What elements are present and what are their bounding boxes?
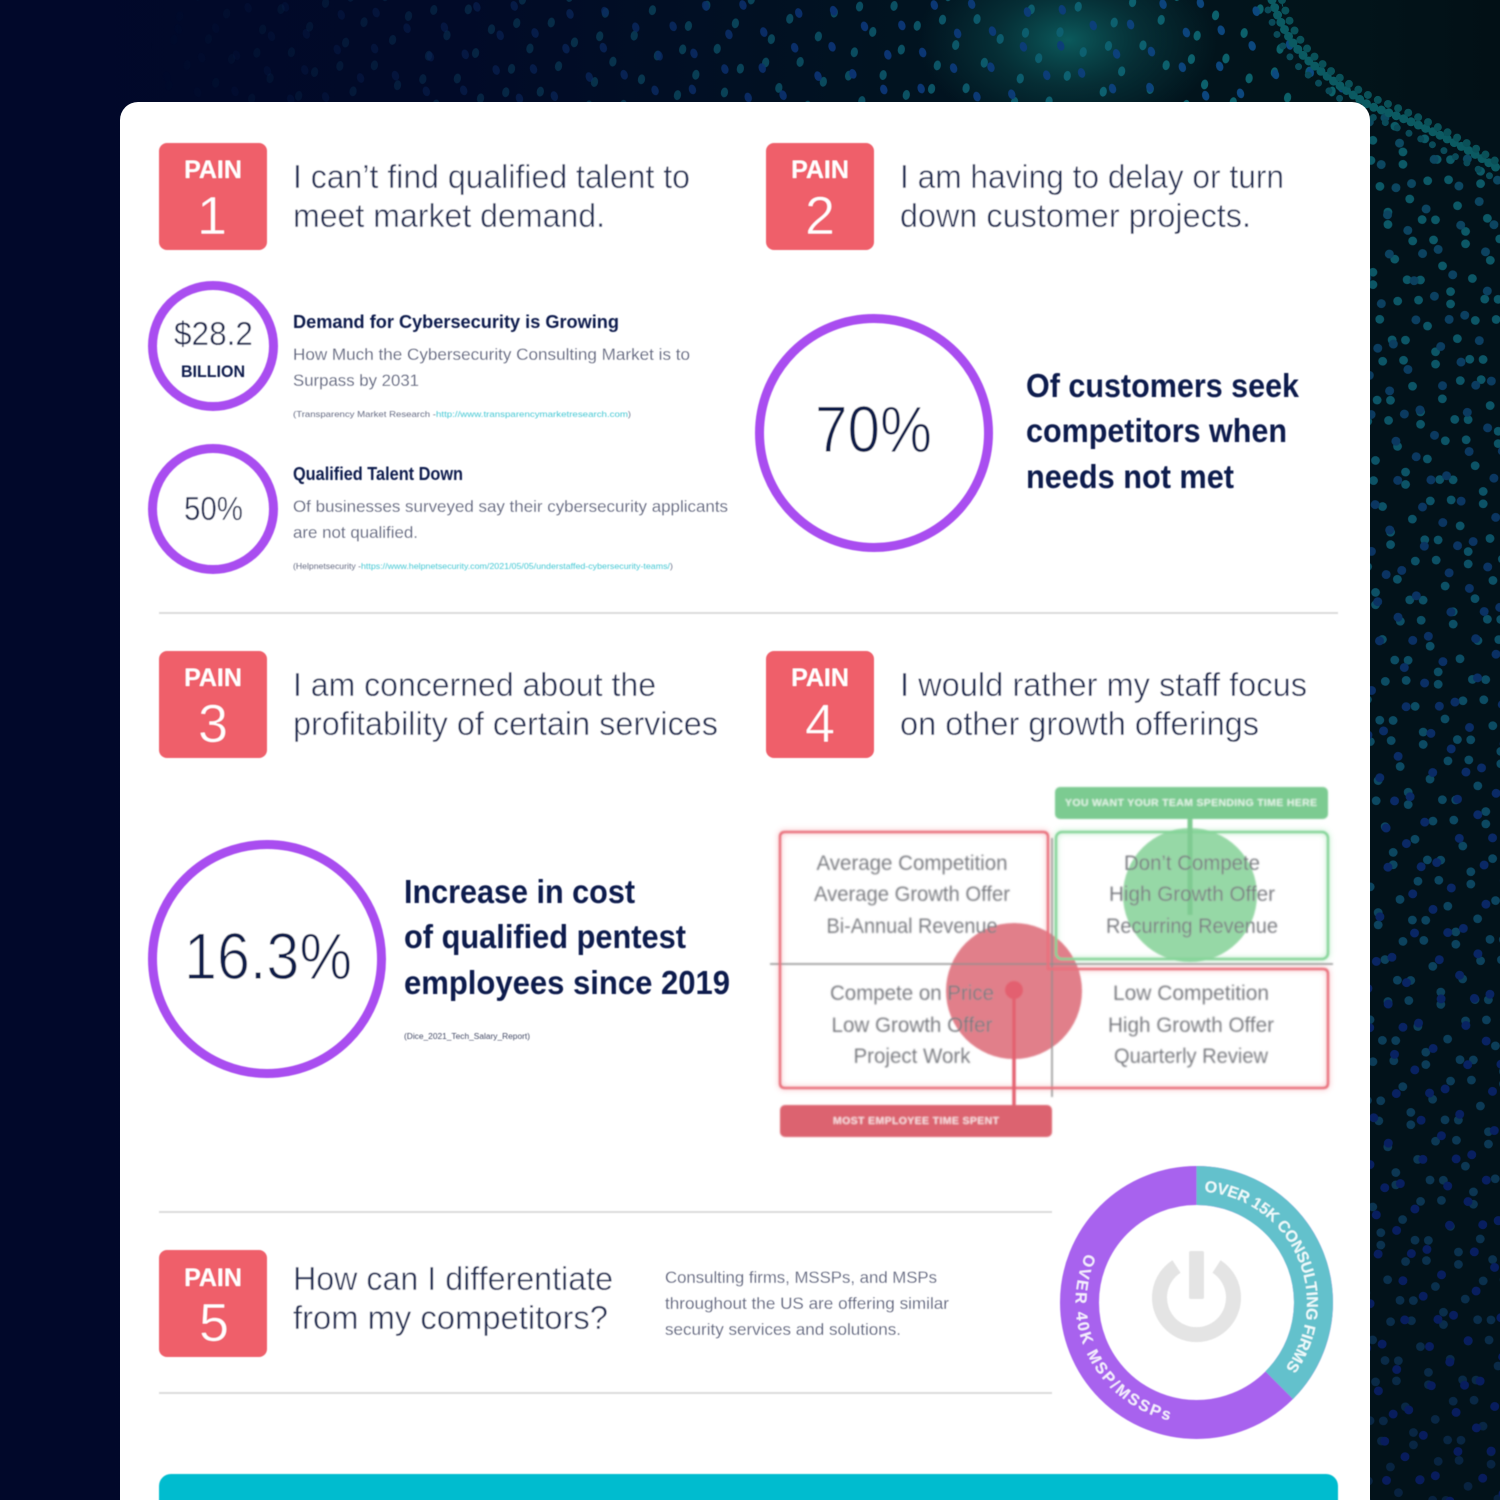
quadrant text: bottom right: Low Competition <box>1113 981 1269 1005</box>
label: green <box>1055 787 1328 819</box>
quadrant text: bottom left: Compete on Price <box>830 981 994 1005</box>
ring: 28.2 billion <box>152 286 274 406</box>
quadrant text: top left <box>814 851 1010 938</box>
ring: 50 percent: 50% <box>184 490 243 527</box>
text: customers seek competitors <box>1026 367 1300 495</box>
badge: pain 2: PAIN <box>791 156 849 184</box>
donut chart <box>1059 1165 1334 1440</box>
text: consulting firms: security services and solutions. <box>665 1320 901 1339</box>
heading: pain 1: meet market demand. <box>293 197 605 234</box>
text: customers seek competitors: competitors when <box>1026 412 1287 449</box>
white card <box>120 102 1370 1500</box>
donut label: consulting firms: OVER 15K CONSULTING FIRMS <box>1204 1180 1319 1374</box>
highlight: green circle <box>1123 828 1257 962</box>
text: demand for cybersecurity: Surpass by 2031 <box>293 371 419 390</box>
badge: pain 3: 3 <box>198 694 228 754</box>
ring: 70 percent <box>760 318 988 548</box>
quadrant text: bottom left <box>830 981 994 1068</box>
badge: pain 4: PAIN <box>791 664 849 692</box>
box glows <box>780 832 1328 1088</box>
quadrant text: top left: Average Competition <box>816 851 1008 875</box>
text: customers seek competitors: Of customers seek <box>1026 367 1300 404</box>
text: consulting firms: Consulting firms, MSSPs, and MSPs <box>665 1268 937 1287</box>
stat: 70 percent <box>760 318 1300 548</box>
stat: 16.3 percent <box>152 844 730 1074</box>
quadrant text: bottom right: Quarterly Review <box>1114 1044 1268 1068</box>
text: qualified talent down: Qualified Talent Down <box>293 463 463 484</box>
quadrant text: bottom right <box>1108 981 1274 1068</box>
badge: pain 3 <box>159 651 267 758</box>
pain 1 header <box>159 143 690 250</box>
text: increase in cost: Increase in cost <box>404 873 635 910</box>
teal call-to-action bar <box>159 1474 1338 1500</box>
quadrant text: top left: Bi-Annual Revenue <box>826 914 998 938</box>
quadrant text: top right: High Growth Offer <box>1109 882 1275 906</box>
quadrant text: top left: Average Growth Offer <box>814 882 1010 906</box>
heading: pain 2 <box>900 158 1284 234</box>
ring: 70 percent: 70% <box>815 392 932 466</box>
quadrant text: bottom left: Low Growth Offer <box>832 1013 992 1037</box>
text: consulting firms: throughout the US are offering similar <box>665 1294 949 1313</box>
green outline <box>1056 832 1328 959</box>
red outline <box>780 832 1328 1088</box>
badge: pain 5: PAIN <box>184 1264 242 1292</box>
icon: power <box>1160 1251 1234 1335</box>
badge: pain 1: PAIN <box>184 156 242 184</box>
text: consulting firms <box>665 1268 949 1339</box>
text: increase in cost: employees since 2019 <box>404 964 730 1001</box>
text: qualified talent down: Of businesses surveyed say their cybersecurity applicants <box>293 497 728 516</box>
heading: pain 4 <box>900 666 1307 742</box>
heading: pain 5 <box>293 1260 613 1336</box>
quadrant text: bottom right: High Growth Offer <box>1108 1013 1274 1037</box>
heading: pain 3 <box>293 666 718 742</box>
leader: red <box>1005 981 1023 1106</box>
badge: pain 4 <box>766 651 874 758</box>
quadrant text: top right: Don’t Compete <box>1124 851 1260 875</box>
content <box>147 142 1339 1500</box>
heading: pain 2: down customer projects. <box>900 197 1251 234</box>
text: demand for cybersecurity: (Transparency Market Research - <box>293 409 436 419</box>
badge: pain 2 <box>766 143 874 250</box>
text: demand for cybersecurity: http://www.transparencymarketresearch.com <box>436 409 628 419</box>
quadrant text: top right: Recurring Revenue <box>1106 914 1278 938</box>
quadrant text: bottom left: Project Work <box>854 1044 971 1068</box>
text: demand for cybersecurity: Demand for Cybersecurity is Growing <box>293 311 619 332</box>
stat: 50 percent <box>152 448 728 571</box>
text: increase in cost <box>404 873 730 1041</box>
heading: pain 5: How can I differentiate <box>293 1260 613 1297</box>
text: increase in cost: (Dice_2021_Tech_Salary_Report) <box>404 1032 530 1041</box>
text: increase in cost: of qualified pentest <box>404 918 686 955</box>
heading: pain 5: from my competitors? <box>293 1299 608 1336</box>
badge: pain 4: 4 <box>805 694 835 754</box>
badge: pain 1: 1 <box>197 186 227 246</box>
donut label: MSP: OVER 40K MSP/MSSPs <box>1074 1254 1171 1420</box>
text: qualified talent down: https://www.helpnetsecurity.com/2021/05/05/understaffed-cybersecurity-teams/ <box>361 561 671 571</box>
leader: green <box>1188 815 1192 915</box>
badge: pain 2: 2 <box>805 186 835 246</box>
pain 3 header <box>159 651 718 758</box>
text: demand for cybersecurity: How Much the Cybersecurity Consulting Market is to <box>293 345 690 364</box>
pain 5 header <box>159 1250 613 1357</box>
badge: pain 1 <box>159 143 267 250</box>
ring: 50 percent <box>152 448 274 570</box>
text: qualified talent down <box>293 463 728 571</box>
stat: 28.2 billion <box>152 286 690 419</box>
quadrant text: top right <box>1106 851 1278 938</box>
text: qualified talent down: are not qualified. <box>293 523 418 542</box>
heading: pain 3: profitability of certain services <box>293 705 718 742</box>
text: customers seek competitors: needs not met <box>1026 458 1234 495</box>
axes <box>770 838 1333 1097</box>
text: qualified talent down: ) <box>670 561 673 571</box>
ring: 28.2 billion: BILLION <box>181 362 245 381</box>
heading: pain 4: on other growth offerings <box>900 705 1259 742</box>
text: demand for cybersecurity <box>293 311 690 419</box>
label: red <box>780 1105 1052 1137</box>
highlight: red circle <box>946 923 1082 1059</box>
label: red: MOST EMPLOYEE TIME SPENT <box>833 1115 1000 1127</box>
quadrant chart <box>770 787 1333 1137</box>
ring: 16.3 percent: 16.3% <box>184 919 352 993</box>
heading: pain 3: I am concerned about the <box>293 666 656 703</box>
heading: pain 1: I can’t find qualified talent to <box>293 158 690 195</box>
badge: pain 5 <box>159 1250 267 1357</box>
badge: pain 3: PAIN <box>184 664 242 692</box>
label: green: YOU WANT YOUR TEAM SPENDING TIME HERE <box>1065 797 1317 809</box>
text: qualified talent down: (Helpnetsecurity - <box>293 561 361 571</box>
heading: pain 1 <box>293 158 690 234</box>
pain 4 header <box>766 651 1307 758</box>
badge: pain 5: 5 <box>199 1293 229 1353</box>
heading: pain 4: I would rather my staff focus <box>900 666 1307 703</box>
text: demand for cybersecurity: ) <box>628 409 631 419</box>
ring: 16.3 percent <box>152 844 382 1074</box>
ring: 28.2 billion: $28.2 <box>174 315 253 352</box>
heading: pain 2: I am having to delay or turn <box>900 158 1284 195</box>
pain 2 header <box>766 143 1284 250</box>
